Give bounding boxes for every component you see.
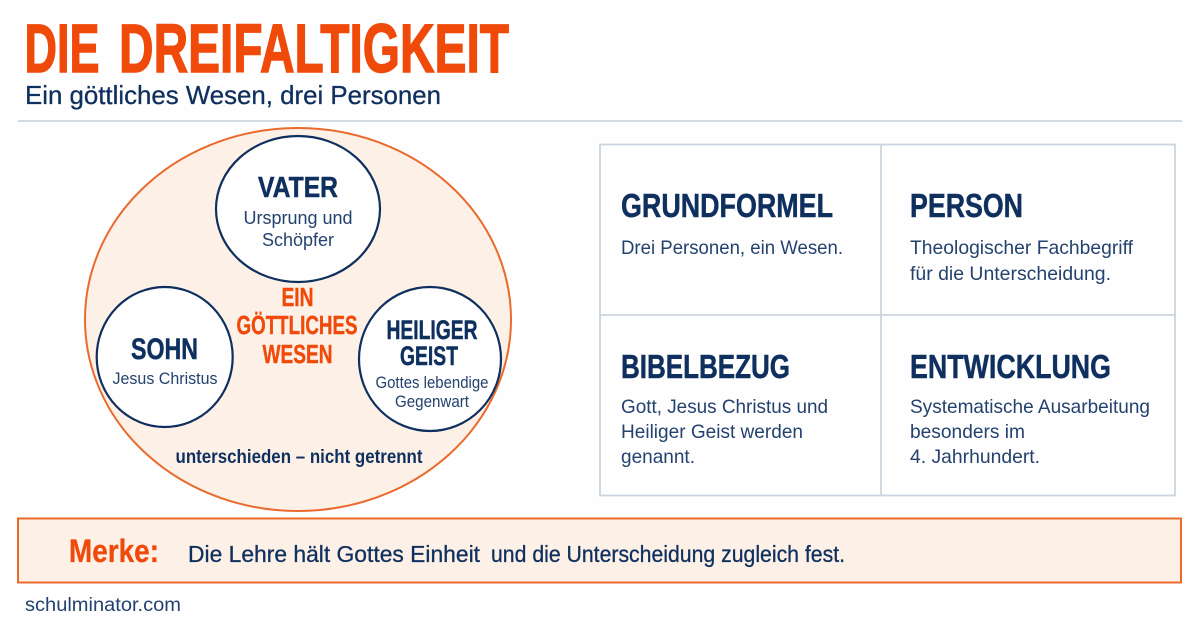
cell: Person: für die Unterscheidung. (910, 263, 1111, 285)
title (24, 10, 509, 87)
callout: Merke: Merke: (69, 533, 159, 569)
circle: Vater: VATER (258, 172, 338, 204)
cell: Person: PERSON (910, 187, 1023, 224)
caption: unterschieden – nicht getrennt (176, 447, 423, 468)
callout: Merke: und die Unterscheidung zugleich fest. (491, 541, 845, 567)
circle: Sohn (97, 287, 233, 427)
circle: Vater: Ursprung und (244, 208, 352, 228)
circle: Heiliger Geist (359, 287, 501, 431)
cell: Grundformel: Drei Personen, ein Wesen. (621, 237, 843, 259)
cell: Grundformel: GRUNDFORMEL (621, 187, 833, 224)
center label: GÖTTLICHES (236, 310, 358, 340)
cell: Bibelbezug: Gott, Jesus Christus und (621, 396, 828, 418)
title: DIE (24, 10, 100, 87)
cell: Entwicklung (910, 348, 1150, 468)
callout: Merke (18, 518, 1181, 582)
circle: Vater (216, 136, 380, 282)
cell: Entwicklung: besonders im (910, 421, 1025, 443)
panel: term grid (600, 144, 1175, 496)
cell: Entwicklung: 4. Jahrhundert. (910, 446, 1040, 468)
circle: Sohn: Jesus Christus (112, 369, 218, 388)
panel: trinity diagram (85, 128, 511, 511)
title: DREIFALTIGKEIT (119, 10, 509, 87)
cell: Grundformel (621, 187, 843, 259)
center label: WESEN (262, 339, 332, 369)
cell: Bibelbezug: genannt. (621, 446, 695, 468)
circle: Sohn: SOHN (131, 333, 198, 366)
cell: Person: Theologischer Fachbegriff (910, 237, 1134, 259)
cell: Bibelbezug: BIBELBEZUG (621, 348, 790, 385)
cell: Entwicklung: ENTWICKLUNG (910, 348, 1111, 385)
cell: Bibelbezug: Heiliger Geist werden (621, 421, 803, 443)
circle: Vater: Schöpfer (262, 230, 334, 250)
footer source: schulminator.com (25, 595, 181, 616)
circle: Heiliger Geist: Gegenwart (395, 393, 469, 411)
center label (236, 282, 358, 369)
cell: Person (910, 187, 1134, 285)
outer ellipse (85, 128, 511, 511)
center label: EIN (282, 282, 314, 312)
circle: Heiliger Geist: Gottes lebendige (376, 374, 488, 392)
callout: Merke: Die Lehre hält Gottes Einheit (188, 541, 481, 567)
circle: Heiliger Geist: GEIST (400, 341, 458, 371)
subtitle: Ein göttliches Wesen, drei Personen (25, 80, 441, 110)
cell: Bibelbezug (621, 348, 828, 468)
cell: Entwicklung: Systematische Ausarbeitung (910, 396, 1150, 418)
circle: Heiliger Geist: HEILIGER (386, 315, 478, 345)
